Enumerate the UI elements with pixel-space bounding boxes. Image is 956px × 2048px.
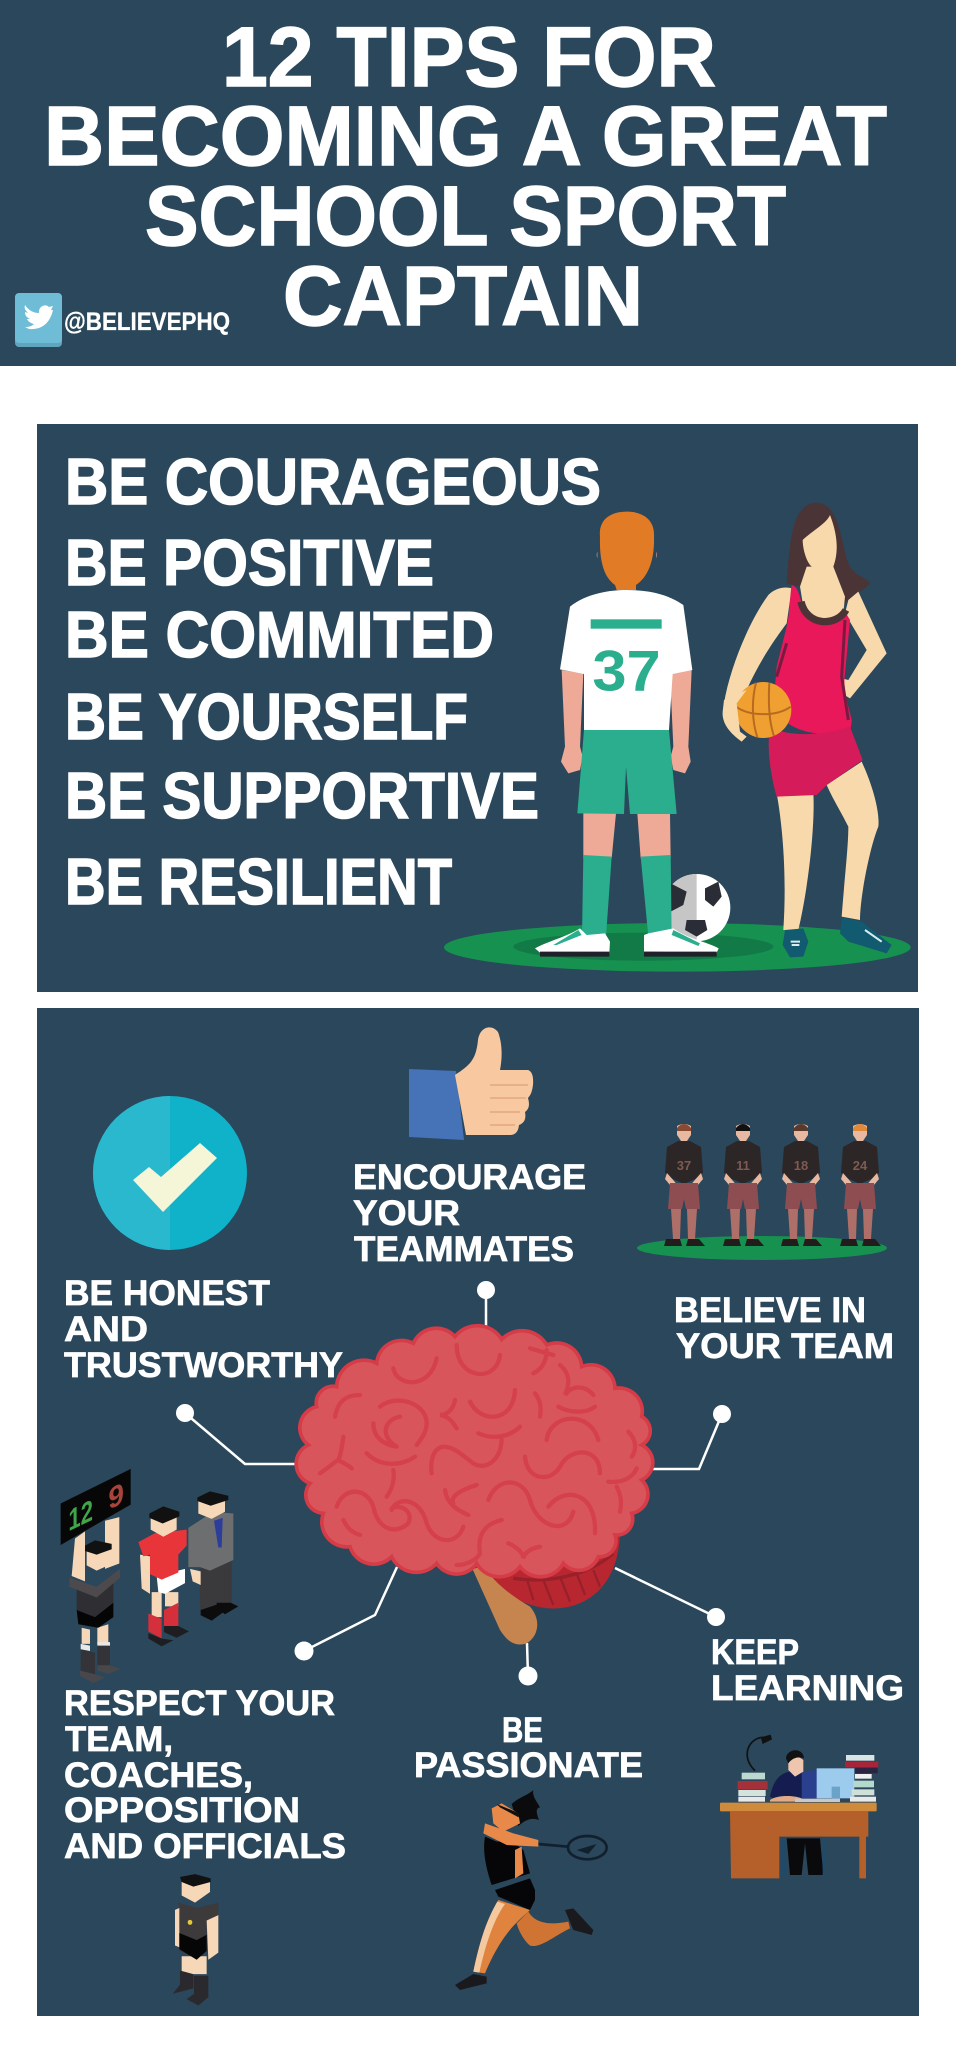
text: respect: TEAM,	[65, 1720, 173, 1759]
player 24	[840, 1124, 881, 1246]
header band	[0, 0, 956, 366]
illustration: two athletes	[444, 503, 911, 972]
player 24: 24	[853, 1158, 868, 1173]
list of qualities: BE COURAGEOUS	[65, 445, 601, 518]
player 11: 11	[736, 1158, 750, 1173]
brain stem	[473, 1565, 537, 1644]
list of qualities: BE SUPPORTIVE	[65, 759, 539, 832]
boy player: 37	[592, 640, 661, 704]
text: be passionate	[414, 1711, 643, 1785]
title: 12 TIPS FOR	[222, 10, 716, 104]
boy player	[535, 512, 719, 957]
text: keep learning: LEARNING	[711, 1669, 904, 1708]
scoreboard official	[61, 1469, 131, 1683]
text: respect	[64, 1684, 346, 1866]
cerebrum	[296, 1326, 653, 1577]
head and arms	[483, 1803, 538, 1878]
connector dots	[176, 1281, 731, 1686]
scoreboard official: 9	[108, 1476, 124, 1517]
icon: check mark badge	[93, 1096, 247, 1250]
hair	[512, 1790, 540, 1826]
illustration: student at a desk	[720, 1735, 878, 1878]
desk	[720, 1799, 877, 1878]
title: CAPTAIN	[283, 249, 643, 343]
legs	[473, 1900, 570, 1973]
title: BECOMING A GREAT	[44, 89, 887, 183]
player 37: 37	[677, 1158, 691, 1173]
twitter badge	[15, 293, 62, 347]
text: be honest	[64, 1274, 343, 1385]
panel: be qualities	[37, 424, 918, 992]
text: encourage your teammates: ENCOURAGE	[353, 1158, 586, 1197]
icon: thumbs up	[409, 1027, 533, 1140]
text: be honest: TRUSTWORTHY	[64, 1346, 343, 1385]
panel: leadership tips around the brain	[37, 1008, 919, 2016]
torso	[484, 1837, 530, 1885]
player in red	[138, 1506, 189, 1646]
person	[770, 1750, 826, 1875]
text: keep learning	[711, 1633, 904, 1708]
brain	[296, 1326, 653, 1644]
shoes	[455, 1908, 593, 1990]
player 37	[664, 1124, 705, 1246]
list of qualities: BE RESILIENT	[65, 845, 452, 918]
text: be passionate: BE	[502, 1711, 543, 1750]
brain folds	[320, 1345, 637, 1565]
scoreboard official: 12	[68, 1493, 93, 1538]
girl player	[723, 503, 892, 957]
grass ground	[444, 923, 911, 972]
list of qualities: BE YOURSELF	[65, 680, 468, 753]
shorts	[495, 1878, 535, 1910]
illustration: officials group	[61, 1469, 238, 1683]
book stacks	[738, 1755, 878, 1802]
text: respect: COACHES,	[64, 1756, 253, 1795]
lamp head	[761, 1735, 772, 1744]
text: be honest: AND	[64, 1310, 148, 1349]
title	[44, 10, 887, 343]
soccer ball	[663, 874, 730, 941]
player 18: 18	[794, 1158, 808, 1173]
racket	[538, 1836, 607, 1859]
text: be passionate: PASSIONATE	[414, 1746, 643, 1785]
text: encourage your teammates: TEAMMATES	[354, 1230, 574, 1269]
text: believe in your team: YOUR TEAM	[676, 1327, 894, 1366]
list of qualities	[65, 445, 601, 918]
player 11	[723, 1124, 764, 1246]
headband	[497, 1804, 519, 1817]
twitter handle: @BELIEVEPHQ	[64, 308, 230, 336]
text: encourage your teammates: YOUR	[353, 1194, 460, 1233]
text: encourage your teammates	[353, 1158, 586, 1269]
text: keep learning: KEEP	[711, 1633, 799, 1672]
text: respect: AND OFFICIALS	[64, 1827, 346, 1866]
text: believe in your team	[674, 1291, 894, 1366]
list of qualities: BE COMMITED	[65, 598, 494, 671]
title: SCHOOL SPORT	[145, 169, 786, 263]
monitor	[817, 1768, 854, 1800]
text: be honest: BE HONEST	[64, 1274, 270, 1313]
connector lines	[185, 1290, 722, 1676]
text: respect: RESPECT YOUR	[64, 1684, 335, 1723]
illustration: team of four players	[637, 1124, 887, 1260]
illustration: tennis player	[455, 1790, 607, 1990]
illustration: referee	[173, 1874, 218, 2005]
desk lamp	[747, 1737, 765, 1771]
team ground	[637, 1236, 887, 1260]
list of qualities: BE POSITIVE	[65, 526, 434, 599]
player 18	[781, 1124, 822, 1246]
text: believe in your team: BELIEVE IN	[674, 1291, 866, 1330]
cerebellum	[487, 1533, 620, 1608]
man in suit	[188, 1491, 238, 1621]
text: respect: OPPOSITION	[64, 1791, 300, 1830]
